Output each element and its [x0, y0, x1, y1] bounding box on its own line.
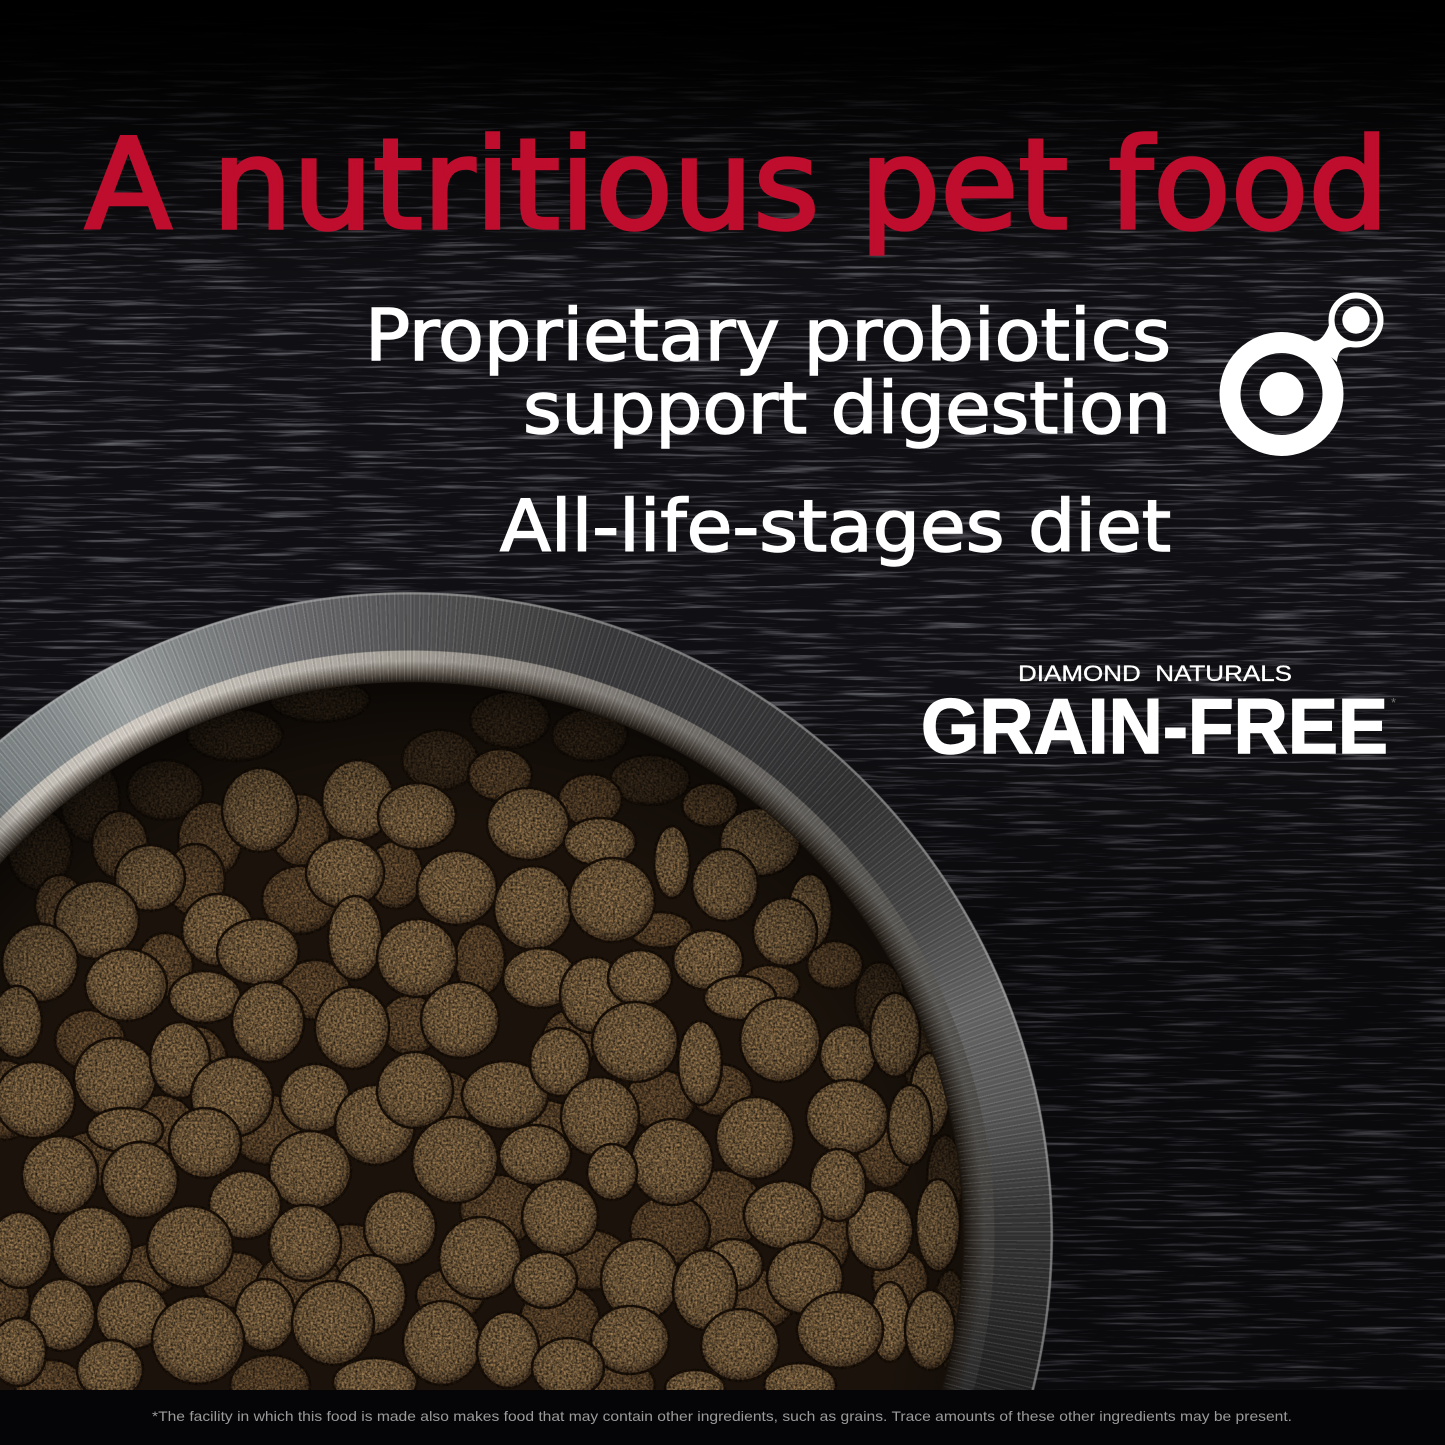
claim: probiotics: support digestion: [523, 367, 1171, 450]
claim: probiotics: [365, 294, 1171, 450]
footer strip: [0, 1390, 1445, 1445]
stainless steel bowl rim: [0, 592, 1054, 1390]
brand logo: *: [1391, 695, 1396, 710]
brand logo: DIAMOND NATURALS: [1018, 661, 1292, 686]
claim: all life stages: All-life-stages diet: [500, 485, 1171, 568]
footnote: *The facility in which this food is made also makes food that may contain other ingredients, such as grains. Trace amounts of these other ingredients may be present.: [152, 1408, 1292, 1424]
bowl interior: [0, 660, 1000, 1390]
inner bowl shadow: [0, 680, 1000, 1390]
icon: probiotic capsule: [1230, 296, 1380, 446]
bowl of kibble: [0, 682, 962, 1390]
brand logo: GRAIN-FREE: [921, 682, 1388, 770]
claim: probiotics: Proprietary probiotics: [365, 294, 1171, 377]
title: A nutritious pet food: [85, 113, 1389, 258]
